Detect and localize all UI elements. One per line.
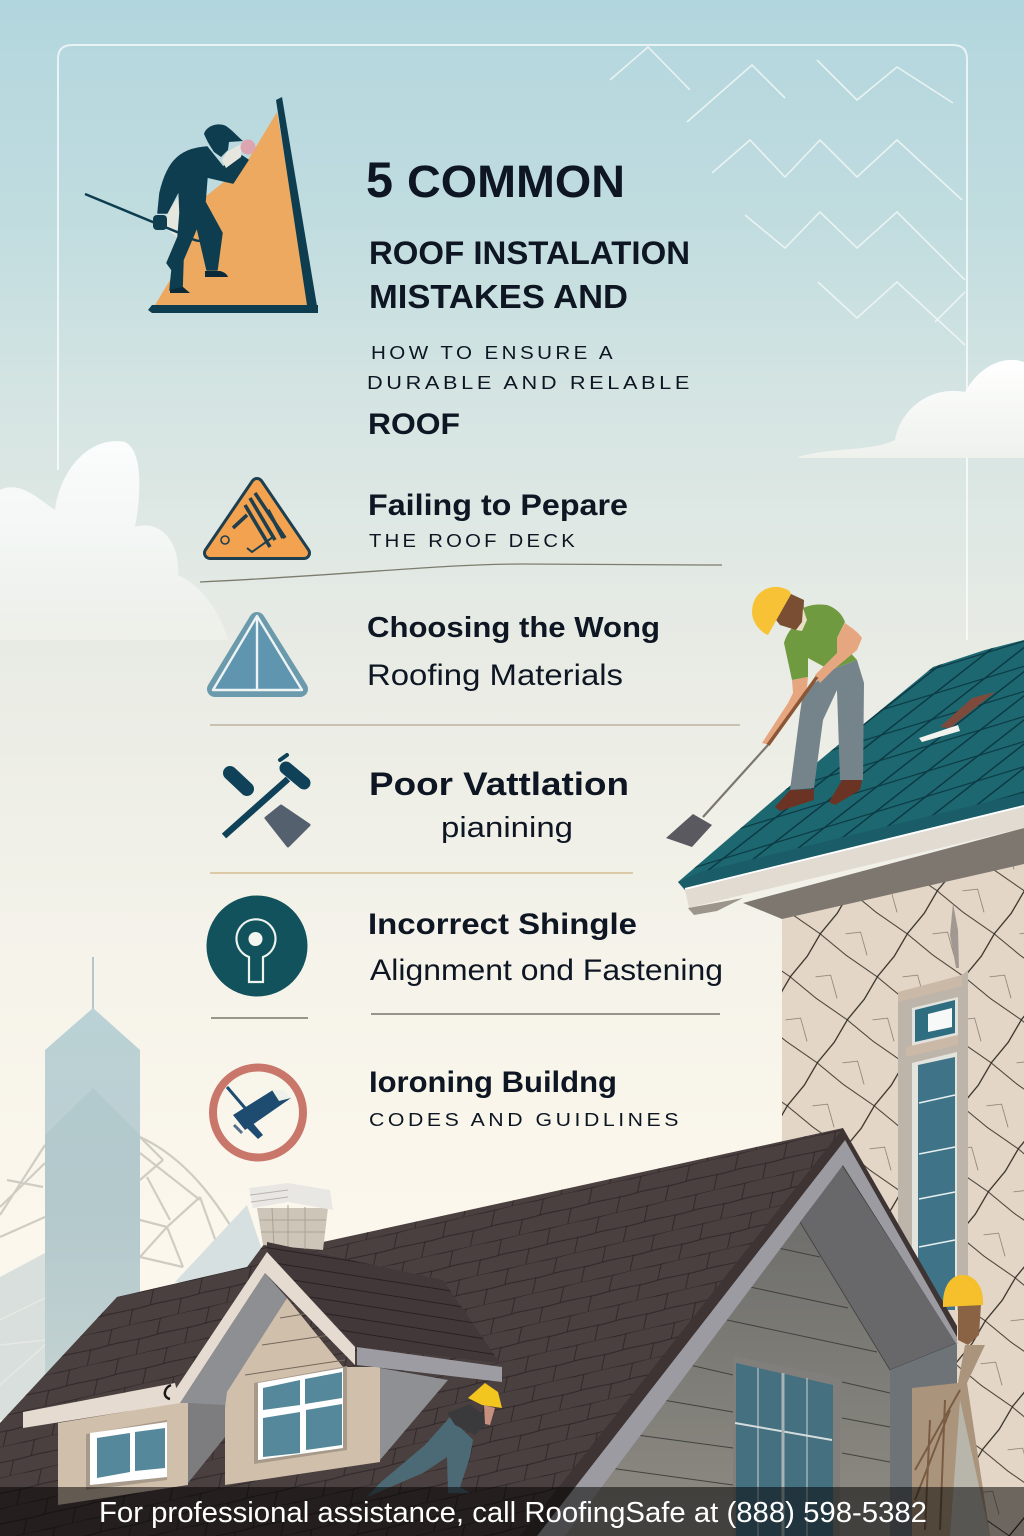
upper roof soffit shadow	[743, 828, 1024, 919]
center dormer shadow side	[380, 1368, 448, 1460]
lower pane	[912, 1052, 957, 1310]
subheading: CODES AND GUIDLINES	[369, 1110, 682, 1130]
title	[366, 152, 693, 441]
small bracket mark	[165, 1385, 171, 1399]
face	[776, 594, 804, 630]
skyline: tower	[45, 957, 140, 1420]
jacket	[447, 1404, 490, 1435]
worker hat	[943, 1275, 983, 1307]
left cloud	[0, 441, 228, 640]
icon: crossed hammer and trowel	[224, 755, 309, 846]
trousers	[367, 1417, 473, 1497]
window frame	[898, 970, 968, 1310]
upper pane	[912, 997, 958, 1046]
mistake 3	[224, 755, 629, 846]
subheading: pianining	[441, 812, 573, 844]
window transom	[906, 1035, 958, 1057]
main gable soffit	[800, 1165, 957, 1370]
orange roof	[155, 112, 310, 307]
trousers	[790, 660, 864, 790]
glove	[240, 140, 256, 154]
shirt	[784, 604, 857, 680]
subheading: Alignment ond Fastening	[370, 954, 723, 987]
heading: Poor Vattlation	[369, 766, 629, 802]
left dormer fascia	[23, 1383, 180, 1428]
main roof fascia	[537, 1140, 957, 1536]
main gable side column	[890, 1343, 957, 1536]
arm gap highlight	[165, 195, 180, 238]
subheading: Roofing Materials	[367, 659, 623, 692]
arms	[762, 623, 862, 745]
skyline: pale mountain	[175, 1205, 262, 1290]
subtitle line 2: DURABLE AND RELABLE	[367, 373, 693, 393]
icon: blue triangle	[213, 616, 302, 690]
heading: Incorrect Shingle	[368, 908, 637, 941]
center dormer soffit	[180, 1273, 287, 1408]
skyline: haze block	[0, 1253, 45, 1420]
panel frame outline	[58, 45, 967, 640]
heading: Choosing the Wong	[367, 612, 660, 644]
left dormer	[23, 1383, 225, 1505]
title line 1: 5	[366, 152, 393, 208]
worker face	[958, 1304, 981, 1345]
left dormer side	[188, 1403, 225, 1483]
center dormer fascia	[173, 1252, 502, 1403]
boots	[170, 271, 228, 293]
face highlight	[222, 144, 241, 168]
mistake 1	[210, 484, 628, 553]
mistake 4	[206, 896, 723, 996]
center dormer window	[254, 1366, 347, 1464]
mistake 2	[213, 612, 660, 692]
footer text: For professional assistance, call RoofingSafe at (888) 598-5382	[99, 1497, 927, 1529]
hard hat	[468, 1383, 502, 1408]
icon: warning triangle with shingles	[210, 484, 304, 553]
handle	[768, 677, 817, 745]
subheading: THE ROOF DECK	[369, 530, 578, 551]
footer contact band	[0, 1487, 1024, 1536]
boots	[775, 780, 862, 811]
main gable wall	[540, 1160, 957, 1536]
right-hand worker	[912, 1275, 990, 1536]
left dormer wall	[58, 1403, 188, 1505]
center dormer wall	[225, 1298, 380, 1485]
roof fascia board	[685, 806, 1024, 915]
zigzag roof line pattern	[610, 47, 965, 345]
upper teal roof	[678, 640, 1024, 890]
icon: prohibited tool	[213, 1068, 303, 1158]
hard hat	[752, 587, 791, 635]
title line 1: COMMON	[407, 156, 625, 207]
heading: Ioroning Buildng	[369, 1066, 617, 1099]
main dark roof	[0, 1128, 845, 1536]
crouching worker	[367, 1383, 502, 1497]
chimney	[249, 1183, 333, 1250]
face	[484, 1405, 495, 1425]
silhouette body	[158, 147, 248, 290]
right cloud	[798, 360, 1024, 458]
title line 3: MISTAKES AND	[369, 278, 628, 315]
mistake 5	[213, 1066, 682, 1158]
silhouette head	[204, 124, 243, 157]
collar	[796, 608, 807, 631]
tall window on stone wall	[898, 970, 968, 1310]
roof vent patch	[919, 692, 995, 742]
worker clothing	[912, 1345, 990, 1536]
main gable window	[733, 1356, 840, 1536]
subtitle line 1: HOW TO ENSURE A	[371, 343, 616, 363]
main roof dark edges	[520, 1128, 957, 1536]
title line 2: ROOF INSTALATION	[369, 235, 690, 271]
scraper pole and blade	[666, 745, 768, 847]
stone wall	[782, 855, 1024, 1536]
heading: Failing to Pepare	[368, 489, 628, 522]
dark roof frame	[148, 97, 318, 313]
tool and hand	[85, 194, 207, 241]
subtitle line 3: ROOF	[368, 408, 460, 441]
center dormer roof	[267, 1242, 500, 1363]
skyline: lattice dome	[0, 1137, 253, 1267]
icon: keyhole badge	[206, 896, 308, 996]
title emblem: roofer silhouette	[85, 97, 318, 313]
roofer with scraper	[666, 587, 864, 847]
left dormer window	[86, 1420, 167, 1490]
